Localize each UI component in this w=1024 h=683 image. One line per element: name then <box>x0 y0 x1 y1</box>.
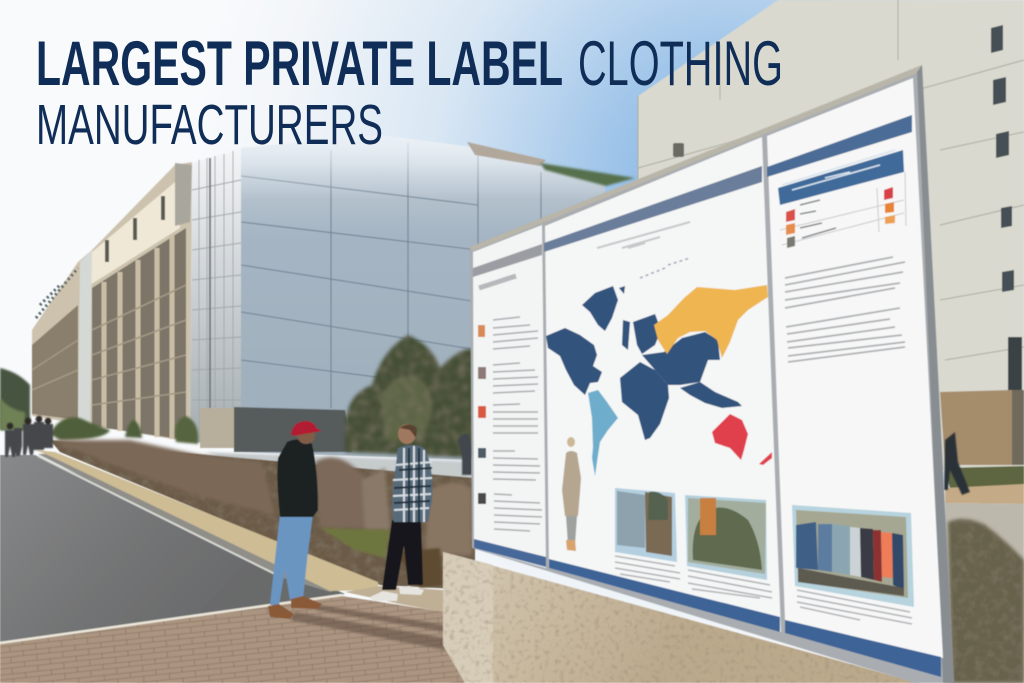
pale pavement <box>945 503 1024 683</box>
display board <box>470 65 954 683</box>
legend swatches <box>478 325 485 337</box>
top fade overlay <box>241 135 605 200</box>
table rows <box>780 172 906 245</box>
grass strip <box>945 466 1024 488</box>
panel 2: world map <box>544 137 781 632</box>
map caption <box>597 222 690 248</box>
pedestrian <box>944 432 970 495</box>
iceland and uk <box>619 286 645 350</box>
europe <box>633 314 661 354</box>
bottom band <box>785 620 941 677</box>
arctic islands <box>640 258 690 278</box>
new zealand <box>759 452 772 465</box>
panel heading <box>479 276 516 288</box>
sidewalk <box>945 484 1024 504</box>
person: man in red cap <box>268 421 322 619</box>
top band <box>473 244 542 277</box>
title <box>36 29 783 157</box>
photo 2 <box>685 495 767 580</box>
title line 1 bold: LARGEST PRIVATE LABEL <box>36 29 563 99</box>
grass patches <box>320 528 390 558</box>
legend text lines <box>493 317 542 531</box>
north america <box>546 328 602 395</box>
tile cladding section <box>190 148 241 448</box>
shrubs <box>948 519 1024 683</box>
right side ground <box>944 432 1024 683</box>
photo 3: coats <box>792 505 914 607</box>
strip between road and curb <box>38 454 345 592</box>
curb <box>35 450 378 591</box>
red cap <box>291 421 322 436</box>
wall lamp <box>673 143 684 157</box>
head <box>297 426 315 444</box>
building tan base <box>940 390 1012 465</box>
planting strip with dry shrubs <box>50 440 475 590</box>
jeans <box>270 514 313 605</box>
body text block 2 <box>786 308 905 362</box>
title line 1 regular: CLOTHING <box>578 29 783 99</box>
people near the board <box>458 434 472 475</box>
photo 1 <box>615 488 677 562</box>
photo 3 caption <box>797 590 912 624</box>
white shoes <box>370 586 424 601</box>
australia <box>712 414 748 460</box>
table labels <box>800 200 836 238</box>
plaid shirt <box>392 445 432 522</box>
board frame <box>470 65 954 683</box>
black trousers <box>382 520 423 590</box>
top band <box>544 166 762 252</box>
table swatches <box>786 209 795 222</box>
background pale pavement <box>205 452 480 500</box>
asia in orange <box>654 285 768 358</box>
white pavement line <box>0 595 342 643</box>
right white building <box>638 0 1024 470</box>
table <box>778 150 906 248</box>
left factory building <box>32 135 635 460</box>
building wing facade <box>32 162 192 442</box>
person: man in plaid shirt <box>370 424 432 601</box>
traditional costume figure <box>562 437 581 551</box>
bottom band <box>474 539 546 567</box>
brick pavement <box>0 596 480 683</box>
panel 3: data table and text <box>767 78 943 677</box>
building base <box>234 407 352 452</box>
photo 1 caption <box>615 556 680 582</box>
photo 2 caption <box>688 570 772 598</box>
distant trees at far left <box>0 368 30 430</box>
windows <box>991 25 1014 292</box>
central asia <box>642 332 720 385</box>
large grey panelled facade <box>234 135 635 460</box>
cast shadows on pavement <box>290 605 445 650</box>
road edge line <box>38 456 283 578</box>
concrete block <box>443 552 920 683</box>
black jacket <box>277 439 318 517</box>
table header <box>778 150 904 205</box>
south america <box>588 390 618 476</box>
small tree and shrubs by building <box>0 398 198 444</box>
africa <box>620 362 669 440</box>
distant pedestrians <box>5 416 53 457</box>
panel 1: left legend <box>473 225 546 568</box>
bottom band <box>549 559 780 632</box>
brown shoes <box>268 596 322 619</box>
south-east asia islands <box>680 382 742 408</box>
step by the block <box>345 586 443 612</box>
tree behind the board <box>345 335 475 458</box>
body text block 1 <box>785 257 905 308</box>
head <box>398 424 416 444</box>
world map <box>546 258 772 476</box>
road surface <box>0 455 345 642</box>
top band <box>767 115 912 177</box>
greenland <box>582 286 618 331</box>
title line 2 regular: MANUFACTURERS <box>36 93 383 157</box>
